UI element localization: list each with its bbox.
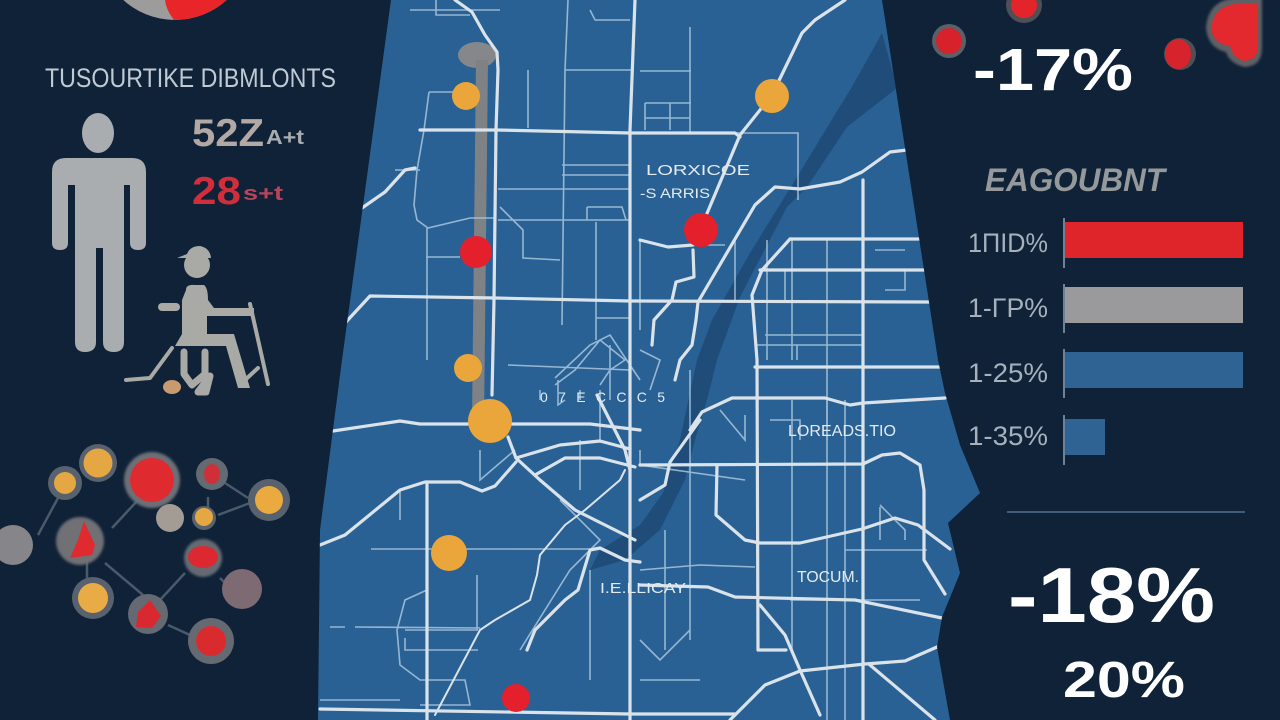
stat values: A+t (266, 127, 304, 149)
icon: seated person (126, 246, 268, 394)
map labels: -S ARRIS (640, 185, 710, 201)
pie chart fragment (124, 0, 227, 20)
top-right dots (932, 0, 1262, 70)
icon: standing person (52, 113, 146, 352)
bar 3 (968, 349, 1243, 398)
stat: 20%: 20% (1063, 651, 1185, 708)
panel: map (318, 0, 980, 720)
network links (38, 483, 250, 635)
grey corridor (458, 42, 496, 420)
heading: left: TUSOURTIKE DIBMLONTS (45, 63, 336, 93)
bar 3: 1-25% (968, 358, 1048, 388)
stat values: 28 (192, 170, 241, 213)
map labels: LOREADS.TIO (788, 423, 896, 440)
bar 2: 1-ΓP% (968, 293, 1048, 323)
stat values: 52Z (192, 112, 264, 155)
map labels: LORXICOE (646, 162, 750, 179)
bar 2 (968, 284, 1243, 333)
network nodes (0, 444, 290, 664)
dark river (590, 33, 897, 570)
bar 1 (968, 218, 1243, 268)
bar 4: 1-35% (968, 421, 1048, 451)
bar 4 (968, 415, 1105, 465)
map labels (540, 162, 896, 597)
bar 1: 1ΠID% (968, 228, 1048, 258)
map labels: 0 7 E C C C 5 (540, 389, 665, 405)
panel: network diagram (0, 444, 290, 664)
thin streets (320, 0, 927, 720)
stat: -18%: -18% (1008, 551, 1215, 639)
stat values: s+t (243, 183, 283, 205)
stat values (192, 112, 304, 213)
heading: bar chart: EAGOUBNT (985, 162, 1167, 198)
map labels: TOCUM. (797, 569, 859, 586)
map markers (431, 79, 789, 712)
map labels: I.E.LLICAY (600, 580, 686, 597)
bar chart (968, 218, 1243, 465)
main roads (320, 0, 950, 720)
stat: -17%: -17% (973, 37, 1133, 103)
